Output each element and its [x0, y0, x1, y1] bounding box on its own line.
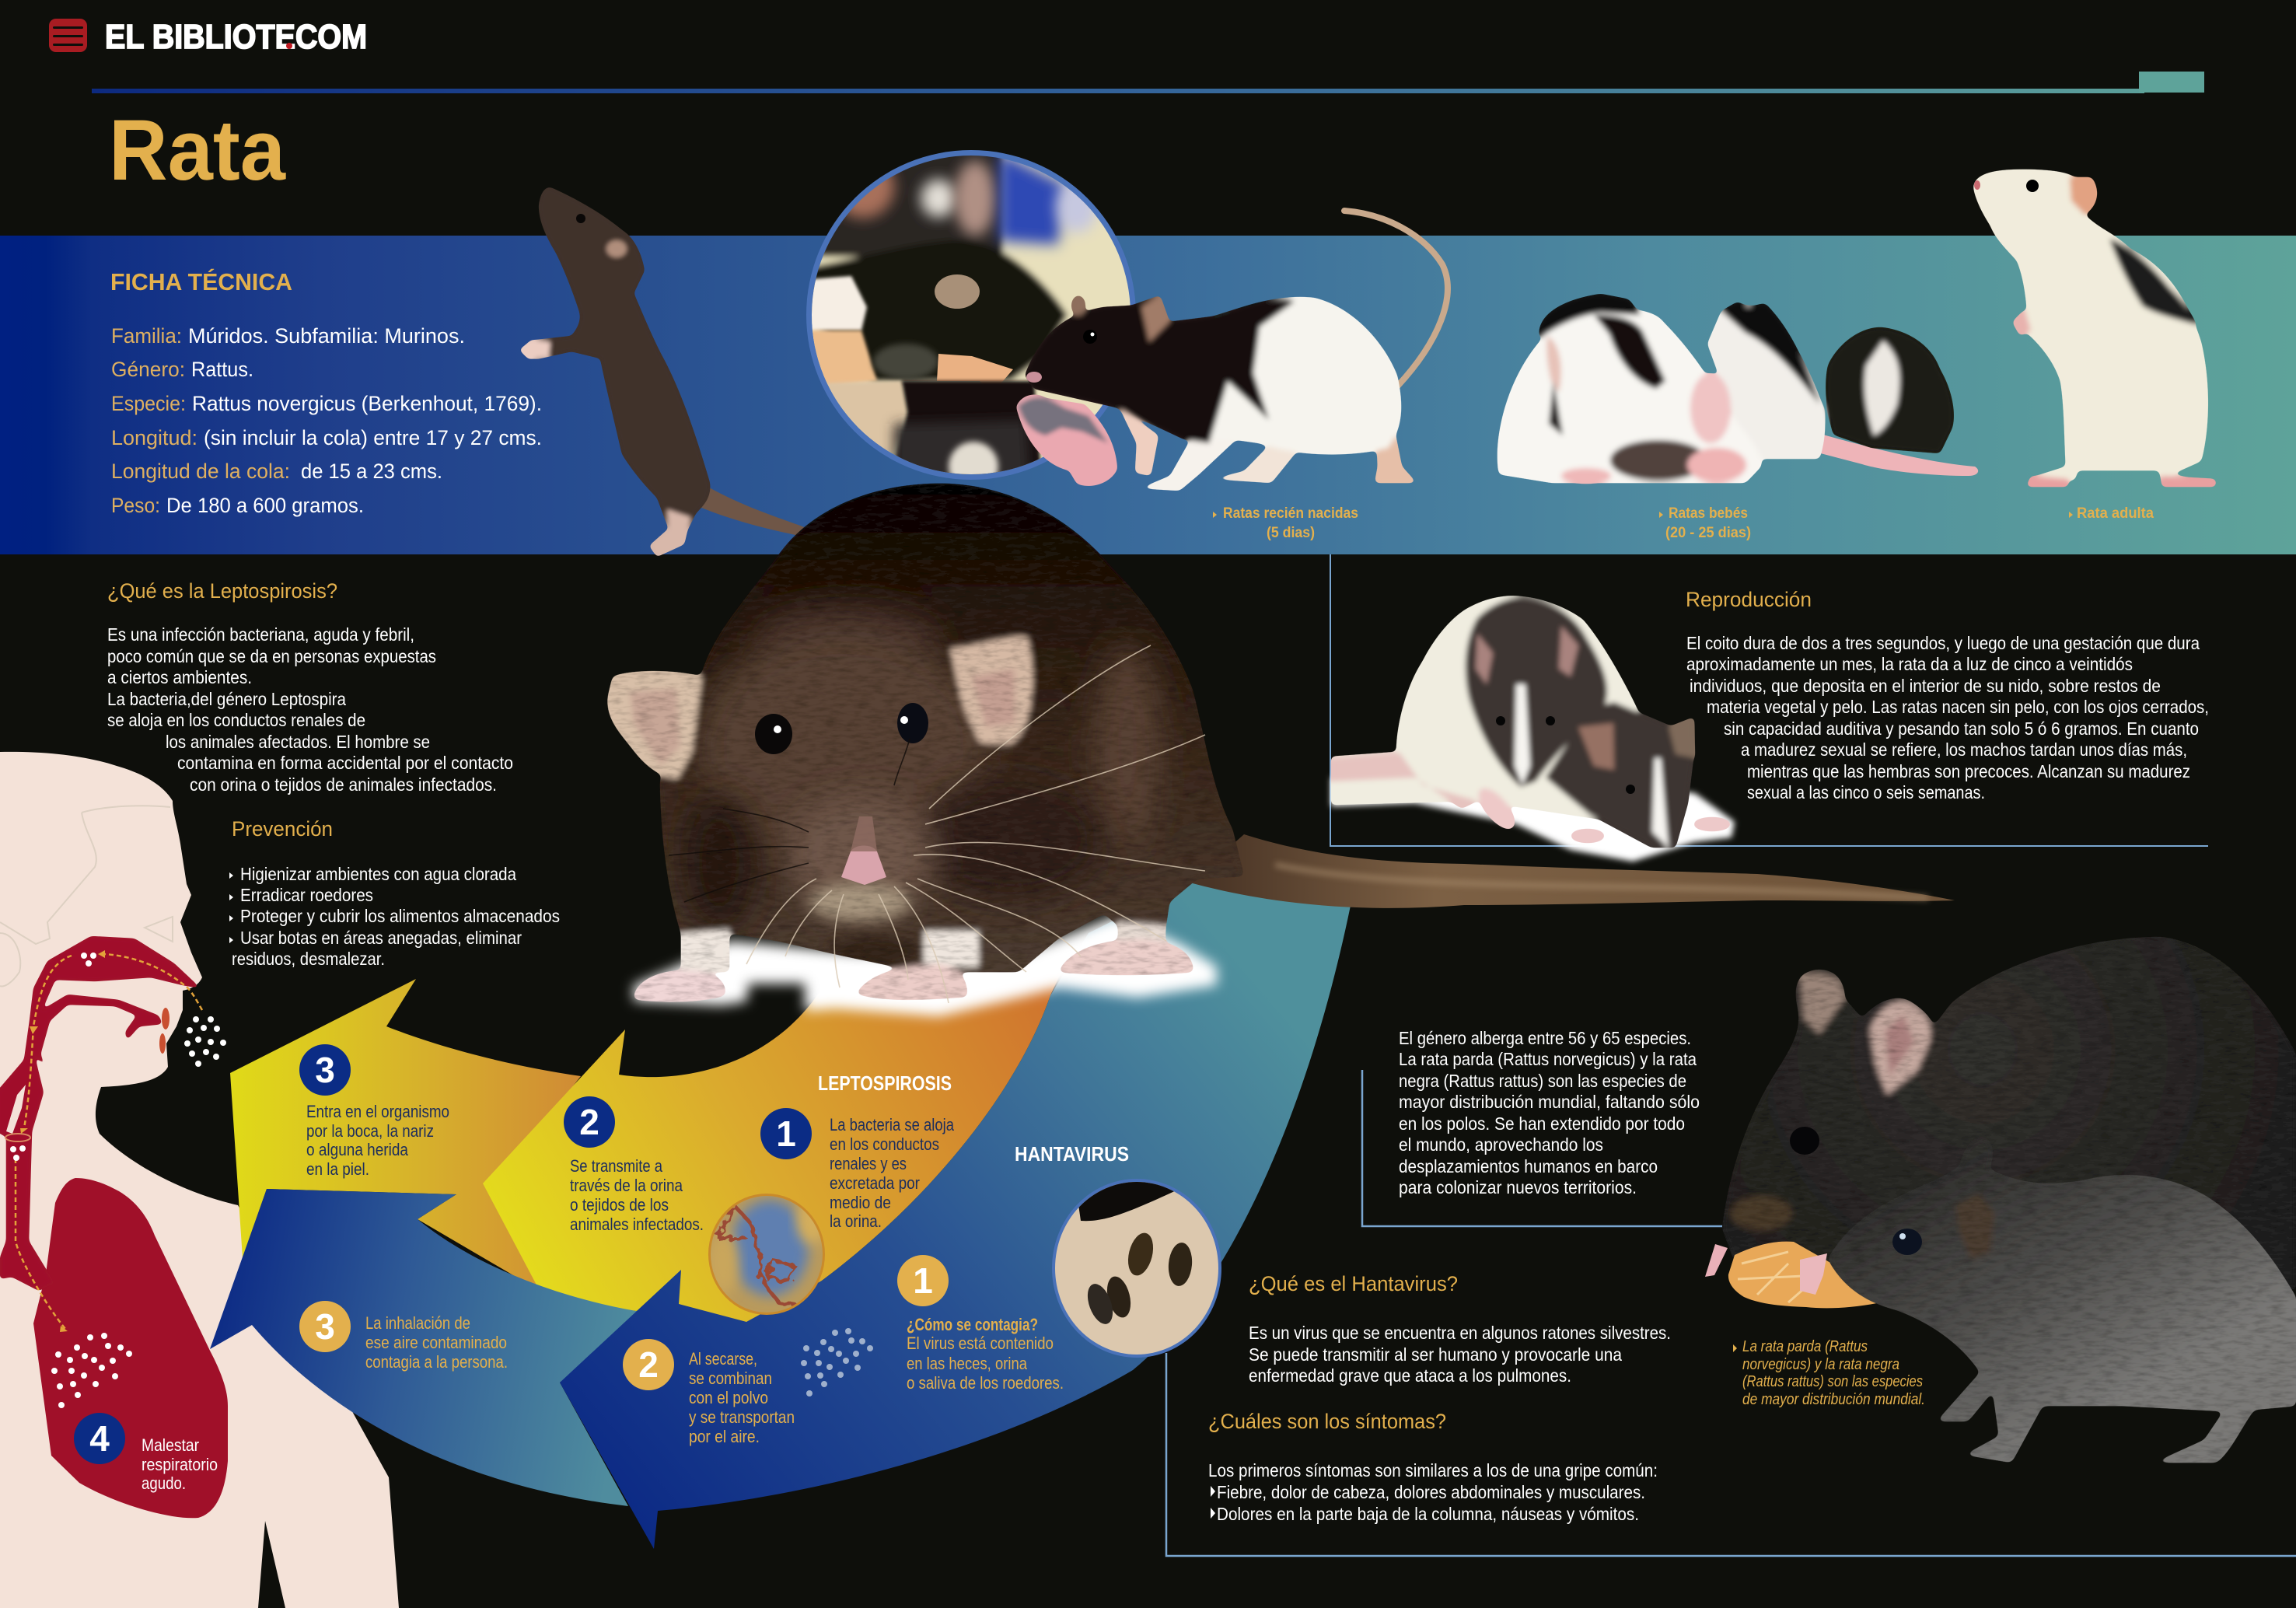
arrow: hantavirus step 2 — [560, 879, 1353, 1549]
text block: prevention — [229, 817, 560, 969]
step: leptospirosis 1: excretada por — [830, 1173, 920, 1193]
text block: leptospirosis: poco común que se da en personas expuestas — [107, 646, 436, 666]
step: leptospirosis 3: o alguna herida — [306, 1140, 409, 1159]
captions: growth stages — [1213, 505, 2154, 541]
text block: symptoms: Dolores en la parte baja de la columna, náuseas y vómitos. — [1217, 1504, 1639, 1524]
text block: reproduction — [1686, 588, 2209, 802]
panel: ficha tecnica: De 180 a 600 gramos. — [166, 494, 364, 517]
text block: prevention: Higienizar ambientes con agua clorada — [240, 864, 516, 884]
photo: nursing rat in circle — [806, 150, 1135, 480]
text block: species: para colonizar nuevos territorios. — [1399, 1177, 1637, 1197]
step: hantavirus 2: con el polvo — [689, 1388, 768, 1407]
step: leptospirosis 2: través de la orina — [570, 1176, 683, 1195]
text block: hantavirus: enfermedad grave que ataca a los pulmones. — [1249, 1365, 1571, 1386]
text block: species: negra (Rattus rattus) son las especies de — [1399, 1071, 1686, 1091]
logo: El Bibliotecom: EL BIBLIOTECOM — [105, 18, 367, 56]
step: leptospirosis 3: en la piel. — [306, 1159, 369, 1179]
text block: hantavirus: ¿Qué es el Hantavirus? — [1249, 1272, 1458, 1295]
text block: hantavirus — [1249, 1272, 1671, 1386]
photo: brown rat standing — [519, 187, 809, 557]
header rule — [92, 72, 2204, 93]
step: leptospirosis 1: 1 — [776, 1113, 796, 1154]
text block: leptospirosis: se aloja en los conductos renales de — [107, 710, 365, 730]
panel: ficha tecnica: Múridos. Subfamilia: Murinos. — [188, 324, 465, 348]
photo: black rat — [1705, 937, 2296, 1308]
photo: grey rat — [1800, 1137, 2296, 1463]
text block: prevention: Usar botas en áreas anegadas, eliminar — [240, 928, 522, 948]
step: leptospirosis 2: o tejidos de los — [570, 1195, 669, 1215]
panel: ficha tecnica: Especie: — [111, 392, 186, 415]
step: hantavirus 2: 2 — [638, 1344, 659, 1385]
text block: reproduction: mientras que las hembras son precoces. Alcanzan su madurez — [1747, 761, 2190, 781]
step: hantavirus 1: en las heces, orina — [907, 1354, 1028, 1373]
arrow: leptospirosis step 2 — [483, 972, 1061, 1337]
text block: symptoms: ¿Cuáles son los síntomas? — [1208, 1410, 1446, 1433]
text block: leptospirosis: La bacteria,del género Leptospira — [107, 689, 346, 709]
step: leptospirosis 3: 3 — [315, 1050, 335, 1090]
text block: reproduction: a madurez sexual se refiere, los machos tardan unos días más, — [1741, 739, 2187, 760]
text block: reproduction: individuos, que deposita en el interior de su nido, sobre restos de — [1690, 676, 2161, 696]
text block: reproduction: materia vegetal y pelo. Las ratas nacen sin pelo, con los ojos cerrados, — [1707, 697, 2209, 717]
step: hantavirus 1: o saliva de los roedores. — [907, 1373, 1064, 1393]
human silhouette — [0, 752, 399, 1608]
step: 4 respiratory: 4 — [89, 1418, 110, 1459]
panel: ficha tecnica: de 15 a 23 cms. — [301, 460, 442, 483]
step: leptospirosis 3: Entra en el organismo — [306, 1102, 449, 1121]
arrow: leptospirosis step 3 — [230, 979, 581, 1291]
step: leptospirosis 2: 2 — [579, 1102, 599, 1142]
panel: ficha tecnica: Género: — [111, 358, 185, 381]
step: hantavirus 2: y se transportan — [689, 1407, 795, 1427]
step: hantavirus 1 — [897, 1255, 1064, 1393]
text block: species — [1399, 1028, 1700, 1197]
step: leptospirosis 1: La bacteria se aloja — [830, 1115, 955, 1134]
text block: leptospirosis: ¿Qué es la Leptospirosis? — [107, 579, 337, 603]
step: hantavirus 2: Al secarse, — [689, 1349, 757, 1369]
airways and lung — [0, 936, 228, 1518]
text block: species: La rata parda (Rattus norvegicus) y la rata — [1399, 1049, 1697, 1069]
step: leptospirosis 3 — [299, 1044, 449, 1179]
panel: ficha tecnica: Rattus. — [191, 358, 253, 381]
step: hantavirus 2 — [623, 1339, 795, 1446]
panel: hantavirus frame — [1166, 1353, 2296, 1556]
particles: inhaled dots — [10, 953, 226, 1408]
panel: ficha tecnica: Familia: — [111, 324, 182, 348]
step: hantavirus 3: 3 — [315, 1306, 335, 1347]
text block: reproduction: El coito dura de dos a tres segundos, y luego de una gestación que dura — [1686, 633, 2200, 653]
text block: leptospirosis: contamina en forma accidental por el contacto — [177, 753, 513, 773]
text block: leptospirosis: Es una infección bacteriana, aguda y febril, — [107, 624, 414, 645]
text block: prevention: Prevención — [232, 817, 333, 841]
panel: species frame — [1362, 1070, 1722, 1226]
step: leptospirosis 3: por la boca, la nariz — [306, 1121, 434, 1141]
label: hantavirus: HANTAVIRUS — [1015, 1142, 1129, 1166]
step: hantavirus 3: La inhalación de — [365, 1313, 470, 1333]
step: hantavirus 3: contagia a la persona. — [365, 1352, 508, 1372]
step: leptospirosis 1: medio de — [830, 1193, 891, 1212]
step: leptospirosis 2: animales infectados. — [570, 1215, 704, 1234]
caption: rat species: La rata parda (Rattus — [1742, 1338, 1868, 1355]
step: leptospirosis 1: renales y es — [830, 1154, 907, 1173]
text block: species: desplazamientos humanos en barco — [1399, 1156, 1658, 1176]
panel: ficha tecnica: (sin incluir la cola) entre 17 y 27 cms. — [204, 426, 542, 449]
title: Rata — [109, 103, 286, 198]
captions: growth stages: Rata adulta — [2077, 505, 2154, 522]
photo: droppings on palm circle — [1052, 1179, 1221, 1358]
step: hantavirus 3: ese aire contaminado — [365, 1333, 507, 1352]
text block: leptospirosis: los animales afectados. El hombre se — [166, 732, 430, 752]
text block: prevention: residuos, desmalezar. — [232, 949, 385, 969]
step: leptospirosis 1 — [760, 1108, 955, 1231]
step: leptospirosis 1: la orina. — [830, 1211, 882, 1231]
text block: species: en los polos. Se han extendido por todo — [1399, 1113, 1685, 1134]
panel: reproduction frame — [1330, 554, 2208, 846]
text block: reproduction: sin capacidad auditiva y pesando tan solo 5 ó 6 gramos. En cuanto — [1724, 718, 2199, 739]
panel: ficha tecnica: FICHA TÉCNICA — [110, 268, 292, 295]
text block: symptoms — [1208, 1410, 1658, 1524]
panel: ficha tecnica: Longitud de la cola: — [111, 460, 290, 483]
step: hantavirus 1: El virus está contenido — [907, 1334, 1054, 1353]
label: leptospirosis: LEPTOSPIROSIS — [818, 1071, 952, 1095]
panel: ficha tecnica: Longitud: — [111, 426, 197, 449]
step: 4 respiratory: agudo. — [142, 1473, 186, 1493]
captions: growth stages: (20 - 25 dias) — [1665, 525, 1751, 541]
text block: hantavirus: Es un virus que se encuentra en algunos ratones silvestres. — [1249, 1323, 1671, 1343]
step: hantavirus 1: 1 — [913, 1260, 933, 1301]
step: hantavirus 3 — [299, 1301, 508, 1372]
step: leptospirosis 1: en los conductos — [830, 1134, 939, 1154]
caption: rat species: (Rattus rattus) son las especies — [1742, 1373, 1923, 1390]
photo: adult rat — [1973, 170, 2216, 487]
text block: species: El género alberga entre 56 y 65 especies. — [1399, 1028, 1691, 1048]
panel: ficha tecnica — [110, 268, 542, 517]
step: 4 respiratory: Malestar — [142, 1435, 199, 1455]
text block: prevention: Proteger y cubrir los alimentos almacenados — [240, 906, 560, 926]
particles: airborne dust — [801, 1328, 873, 1397]
photo: leptospira bacteria circle — [708, 1194, 825, 1315]
captions: growth stages: Ratas bebés — [1669, 505, 1748, 522]
text block: leptospirosis: a ciertos ambientes. — [107, 667, 252, 687]
step: 4 respiratory: respiratorio — [142, 1455, 218, 1474]
caption: rat species: de mayor distribución mundial. — [1742, 1391, 1925, 1408]
text block: species: el mundo, aprovechando los — [1399, 1134, 1603, 1155]
text block: reproduction: aproximadamente un mes, la rata da a luz de cinco a veintidós — [1686, 654, 2133, 674]
step: 4 respiratory — [74, 1413, 218, 1493]
caption: rat species — [1733, 1338, 1925, 1408]
step: hantavirus 2: se combinan — [689, 1369, 772, 1388]
panel: ficha tecnica: Rattus novergicus (Berkenhout, 1769). — [192, 392, 542, 415]
text block: leptospirosis: con orina o tejidos de animales infectados. — [190, 774, 497, 795]
photo: rat carrying newborn, 5 days — [1016, 211, 1448, 491]
text block: symptoms: Los primeros síntomas son similares a los de una gripe común: — [1208, 1460, 1658, 1480]
text block: species: mayor distribución mundial, faltando sólo — [1399, 1092, 1700, 1112]
step: leptospirosis 2: Se transmite a — [570, 1156, 663, 1176]
panel: ficha tecnica: Peso: — [111, 494, 160, 517]
text block: leptospirosis — [107, 579, 513, 795]
text block: hantavirus: Se puede transmitir al ser humano y provocarle una — [1249, 1344, 1622, 1365]
panel: blue band — [0, 236, 2296, 554]
captions: growth stages: Ratas recién nacidas — [1223, 505, 1358, 522]
arrow: hantavirus step 3 — [210, 1189, 684, 1506]
captions: growth stages: (5 dias) — [1267, 525, 1315, 541]
step: leptospirosis 2 — [564, 1096, 704, 1234]
text block: symptoms: Fiebre, dolor de cabeza, dolores abdominales y musculares. — [1217, 1482, 1645, 1502]
step: hantavirus 1: ¿Cómo se contagia? — [907, 1315, 1038, 1334]
caption: rat species: norvegicus) y la rata negra — [1742, 1356, 1899, 1373]
step: hantavirus 2: por el aire. — [689, 1427, 760, 1446]
photo: two hooded rats — [1331, 596, 1735, 862]
text block: reproduction: Reproducción — [1686, 588, 1812, 611]
photo: baby rats, 20-25 days — [1497, 294, 1978, 484]
text block: reproduction: sexual a las cinco o seis semanas. — [1747, 782, 1985, 802]
text block: prevention: Erradicar roedores — [240, 885, 373, 905]
photo: main brown rat — [608, 484, 1955, 1016]
